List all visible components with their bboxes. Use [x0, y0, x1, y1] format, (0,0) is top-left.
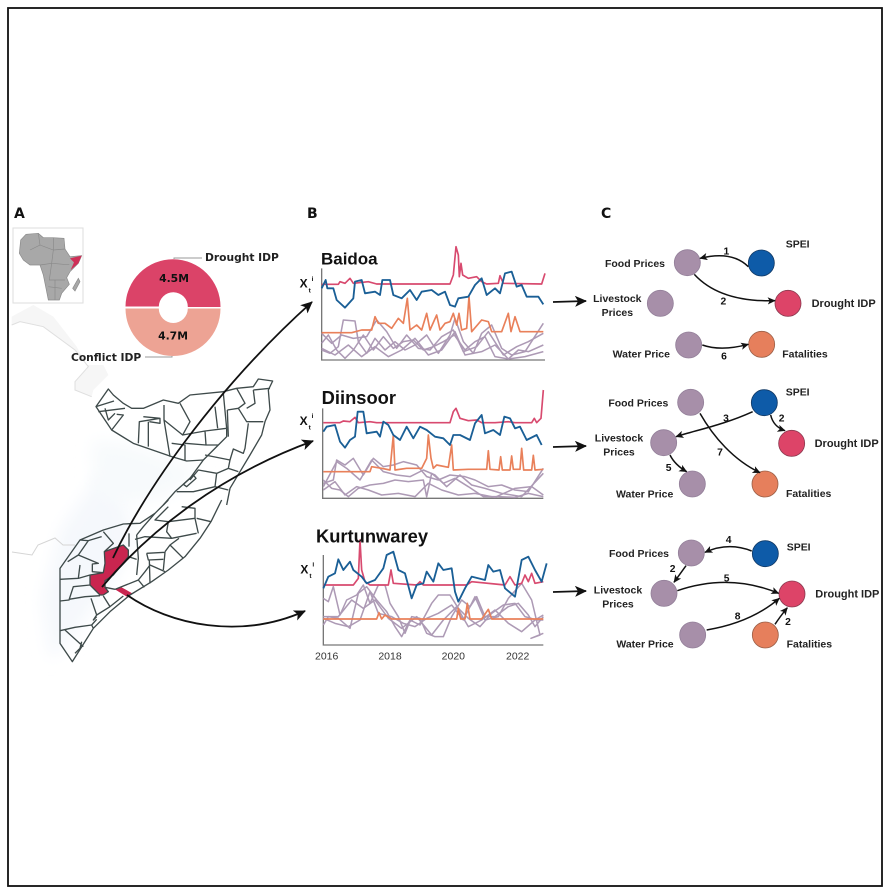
network: Baidoa: Prices	[602, 308, 633, 319]
chart: Kurtunwarey: 2016	[315, 651, 338, 662]
heading: B: B	[307, 206, 318, 222]
donut chart: IDP totals: Conflict IDP	[71, 351, 141, 364]
chart: Diinsoor: t	[309, 425, 312, 432]
inset: Africa locator map	[13, 228, 83, 303]
network: Baidoa: 6	[721, 351, 727, 362]
heading: A: A	[14, 206, 25, 222]
network: Kurtunwarey: 8	[735, 611, 741, 622]
network: Baidoa: Fatalities	[782, 349, 828, 360]
donut chart: IDP totals: 4.5M	[159, 272, 189, 285]
chart: Diinsoor: X	[300, 414, 308, 428]
network: Diinsoor: Drought IDP	[815, 438, 879, 450]
network: Kurtunwarey: Water Price	[616, 640, 674, 651]
network: Diinsoor: Fatalities	[786, 489, 832, 500]
chart: Baidoa: t	[309, 287, 312, 294]
network: Diinsoor: Livestock	[595, 434, 643, 445]
network: Kurtunwarey: Livestock	[594, 586, 642, 597]
donut chart: IDP totals	[71, 251, 279, 364]
network: Baidoa: Drought IDP	[812, 298, 876, 310]
network: Kurtunwarey: 5	[724, 573, 730, 584]
chart: Kurtunwarey: t	[309, 573, 312, 580]
chart: Kurtunwarey: 2018	[378, 651, 402, 662]
chart: Kurtunwarey: Kurtunwarey	[316, 526, 429, 547]
network: Baidoa	[593, 240, 876, 362]
network: Baidoa: 1	[723, 247, 729, 258]
panel A: map and donut	[12, 206, 279, 662]
chart: Kurtunwarey: i	[312, 561, 314, 568]
network: Diinsoor: Water Price	[616, 489, 673, 500]
network: Kurtunwarey: 4	[726, 535, 732, 546]
network: Baidoa: 2	[720, 296, 726, 307]
heading: C: C	[601, 206, 611, 222]
donut chart: IDP totals: 4.7M	[158, 330, 188, 342]
chart: Baidoa: i	[312, 276, 314, 283]
arrows: map to time series	[102, 302, 313, 627]
map: northern Somalia districts	[96, 379, 273, 505]
map: southern Somalia districts with highlighted districts	[60, 500, 222, 662]
network: Diinsoor: SPEI	[786, 388, 810, 399]
chart: Diinsoor: i	[312, 413, 314, 420]
chart: Baidoa: Baidoa	[321, 249, 378, 268]
chart: Kurtunwarey: 2022	[506, 651, 529, 662]
network: Kurtunwarey: Food Prices	[609, 549, 669, 560]
arrows: time series to networks	[553, 301, 586, 592]
network: Kurtunwarey: 2	[670, 564, 676, 575]
network: Kurtunwarey: SPEI	[787, 542, 811, 553]
chart: Kurtunwarey	[300, 526, 547, 662]
network: Baidoa: SPEI	[786, 240, 810, 251]
chart: Kurtunwarey: X	[300, 562, 308, 576]
highlighted districts	[90, 545, 128, 595]
network: Kurtunwarey: Prices	[602, 600, 634, 611]
chart: Kurtunwarey: 2020	[442, 651, 465, 662]
map: neighbouring land background	[12, 305, 200, 660]
network: Diinsoor: 7	[717, 447, 723, 458]
network: Baidoa: Food Prices	[605, 259, 665, 270]
network: Kurtunwarey: Drought IDP	[815, 588, 879, 600]
network: Diinsoor	[595, 388, 879, 500]
chart: Diinsoor: Diinsoor	[322, 387, 396, 408]
network: Diinsoor: 2	[779, 413, 785, 424]
network: Baidoa: Water Price	[613, 350, 670, 361]
panel C: causal networks	[593, 206, 879, 651]
network: Kurtunwarey: Fatalities	[787, 640, 832, 651]
donut chart: IDP totals: Drought IDP	[205, 251, 279, 264]
network: Diinsoor: Prices	[603, 448, 635, 459]
network: Diinsoor: 5	[666, 463, 672, 474]
network: Diinsoor: 3	[723, 413, 729, 424]
chart: Baidoa	[300, 247, 545, 360]
chart: Baidoa: X	[300, 277, 308, 291]
panel B: time series	[300, 206, 547, 662]
chart: Diinsoor	[300, 387, 543, 498]
network: Baidoa: Livestock	[593, 294, 642, 305]
network: Kurtunwarey: 2	[785, 617, 791, 628]
network: Kurtunwarey	[594, 535, 879, 651]
network: Diinsoor: Food Prices	[608, 399, 669, 410]
